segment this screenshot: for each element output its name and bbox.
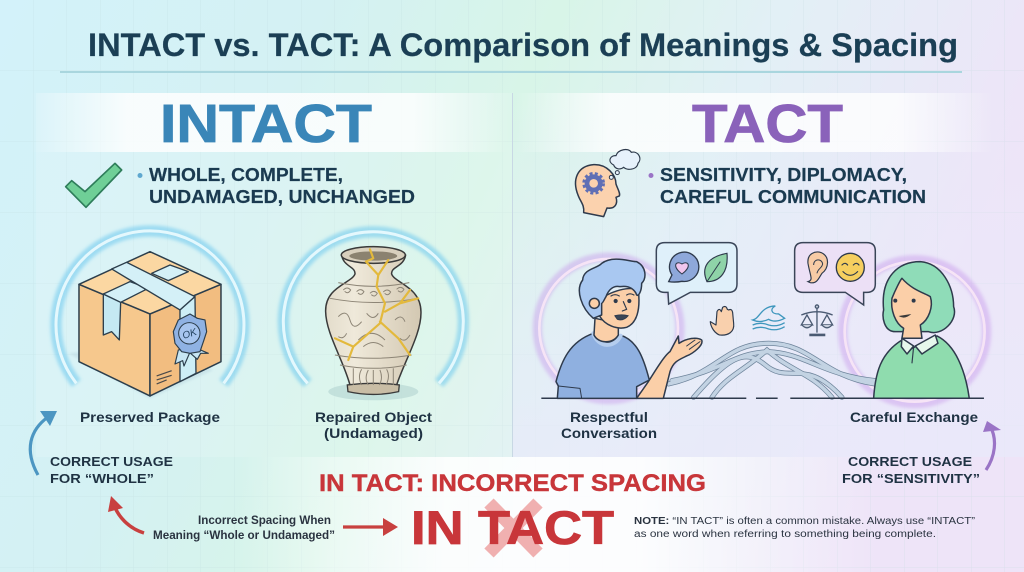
panel: TACT <box>512 93 1024 457</box>
icon: pale red cross <box>489 503 538 553</box>
text: IN TACT wrong form: IN TACT <box>411 501 614 554</box>
callout: correct usage whole <box>50 454 173 486</box>
note: as one word when referring to something being complete. <box>634 529 936 540</box>
label: Respectful Conversation: Conversation <box>561 425 657 441</box>
heading: INTACT: INTACT <box>160 94 372 154</box>
callout: correct usage whole: FOR “WHOLE” <box>50 471 154 486</box>
icon: green check mark <box>66 163 122 207</box>
arrow: red curved <box>108 496 144 533</box>
callout: correct usage sensitivity <box>842 454 980 486</box>
arrow: purple usage arrow <box>983 421 1001 470</box>
icon: head with gear and thought bubble <box>576 150 640 217</box>
text: incorrect spacing explanation <box>153 515 335 542</box>
heading: TACT: TACT <box>692 94 843 154</box>
definition text: TACT: CAREFUL COMMUNICATION <box>660 186 926 207</box>
label: Preserved Package: Preserved Package <box>80 409 220 425</box>
label: Repaired Object: (Undamaged) <box>324 425 423 441</box>
text: incorrect spacing explanation: Meaning “Whole or Undamaged” <box>153 530 335 542</box>
illustration: preserved package <box>56 231 244 398</box>
glow behind incorrect section <box>240 457 880 572</box>
illustration: preserved package: OK <box>181 327 200 342</box>
definition text: TACT: SENSITIVITY, DIPLOMACY, <box>660 164 907 185</box>
arrow: red straight <box>343 518 398 536</box>
title: INTACT vs. TACT: A Comparison of Meanings & Spacing <box>88 27 958 63</box>
icon: raised hand <box>710 306 734 335</box>
label: Respectful Conversation <box>561 409 657 441</box>
definition text: INTACT <box>138 164 415 207</box>
man <box>556 259 702 398</box>
label: Repaired Object: Repaired Object <box>315 409 432 425</box>
callout: correct usage sensitivity: FOR “SENSITIVITY” <box>842 471 980 486</box>
definition text: INTACT: UNDAMAGED, UNCHANGED <box>149 186 415 207</box>
illustration: respectful conversation <box>537 243 987 404</box>
label: Respectful Conversation: Respectful <box>570 409 648 425</box>
icon: balance scales <box>801 305 833 335</box>
woman <box>874 262 969 398</box>
definition text: TACT <box>648 164 926 207</box>
callout: correct usage sensitivity: CORRECT USAGE <box>848 454 972 469</box>
text: incorrect spacing explanation: Incorrect Spacing When <box>198 515 331 527</box>
definition text: INTACT: WHOLE, COMPLETE, <box>149 164 343 185</box>
icon: wave <box>753 306 785 330</box>
speech bubble: heart and leaf <box>656 243 737 304</box>
speech bubble: ear and smile <box>795 243 875 305</box>
panel: INTACT <box>30 93 512 457</box>
illustration: repaired vase <box>283 232 463 400</box>
note <box>634 516 975 540</box>
arrow: blue usage arrow <box>30 411 57 475</box>
callout: correct usage whole: CORRECT USAGE <box>50 454 173 469</box>
heading: incorrect spacing: IN TACT: INCORRECT SPACING <box>319 470 706 497</box>
label: Repaired Object <box>315 409 432 441</box>
ground line <box>541 396 984 401</box>
note: NOTE: “IN TACT” is often a common mistake. Always use “INTACT” <box>634 516 975 527</box>
woven bridge <box>669 343 875 397</box>
label: Careful Exchange: Careful Exchange <box>850 409 978 425</box>
